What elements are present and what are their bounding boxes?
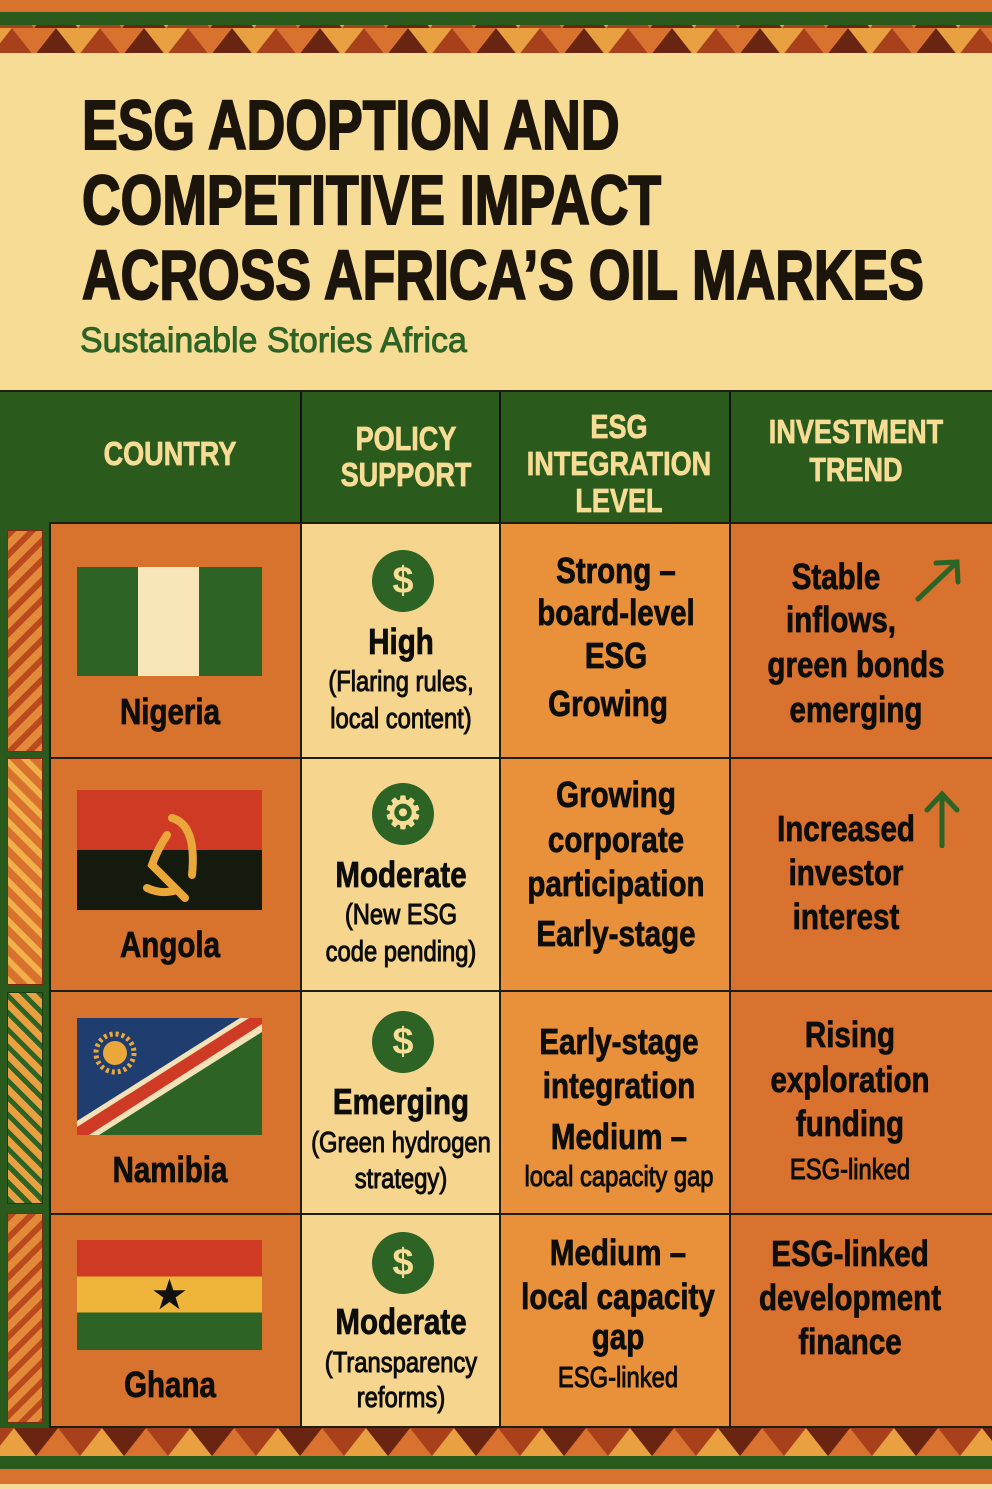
- investment texts: Stable: [792, 556, 880, 597]
- title: ESG ADOPTION AND: [82, 86, 620, 164]
- flag: Nigeria: [77, 567, 262, 676]
- arrow: diagonal up: [916, 559, 960, 602]
- top border: [0, 0, 992, 53]
- policy 2: Moderate: [335, 854, 467, 895]
- policy 3: strategy): [355, 1163, 447, 1195]
- investment texts: green bonds: [767, 644, 945, 685]
- icons: $: [392, 560, 414, 602]
- investment 2: Increased: [777, 808, 915, 849]
- esg 3: local capacity gap: [524, 1161, 714, 1193]
- header row: [0, 390, 992, 522]
- esg 2: corporate: [548, 819, 684, 860]
- esg 3: [524, 1021, 714, 1193]
- investment 2: [777, 808, 915, 937]
- title: ACROSS AFRICA’S OIL MARKES: [82, 236, 924, 314]
- policy 4: (Transparency: [325, 1347, 477, 1379]
- row cells: [49, 522, 992, 1428]
- investment 3: ESG-linked: [790, 1154, 910, 1186]
- investment 3: exploration: [770, 1059, 930, 1100]
- country: Nigeria: Nigeria: [120, 691, 220, 732]
- arrow: up: [924, 790, 960, 848]
- policy 2: (New ESG: [345, 899, 457, 931]
- investment 4: [759, 1233, 942, 1362]
- policy 3: (Green hydrogen: [311, 1127, 491, 1159]
- table: [0, 390, 992, 1428]
- esg 2: [527, 774, 705, 954]
- investment texts: emerging: [790, 689, 922, 730]
- esg 3: Medium –: [551, 1116, 687, 1157]
- icon: dollar 4: $: [392, 1242, 414, 1284]
- esg texts: Strong –: [556, 550, 676, 591]
- header: investment: TREND: [809, 451, 903, 488]
- subtitle: Sustainable Stories Africa: [80, 321, 467, 360]
- country: Ghana: Ghana: [124, 1364, 216, 1405]
- icon: dollar 4: [372, 1232, 434, 1294]
- header: policy: [341, 420, 472, 493]
- investment 3: Rising: [805, 1014, 895, 1055]
- title: COMPETITIVE IMPACT: [82, 161, 661, 239]
- esg 4: gap: [592, 1316, 644, 1357]
- esg 4: Medium –: [550, 1232, 686, 1273]
- policy texts: (Flaring rules,: [328, 666, 474, 698]
- investment 4: development: [759, 1277, 941, 1318]
- investment 2: investor: [789, 852, 903, 893]
- policy texts: [328, 621, 474, 735]
- flag: Ghana: ★: [151, 1271, 188, 1318]
- investment 4: ESG-linked: [771, 1233, 929, 1274]
- policy texts: High: [368, 621, 434, 662]
- policy 4: reforms): [357, 1382, 445, 1414]
- policy 2: [326, 854, 476, 968]
- title: [82, 86, 924, 314]
- left pattern strips: [7, 530, 43, 1423]
- policy texts: local content): [330, 703, 472, 735]
- flag: Angola: [77, 790, 262, 910]
- esg texts: Growing: [548, 683, 668, 724]
- header: esg: ESG: [590, 408, 648, 445]
- policy 2: code pending): [326, 936, 476, 968]
- icon: dollar 3: [372, 1011, 434, 1073]
- header: investment: INVESTMENT: [769, 413, 943, 450]
- investment texts: inflows,: [786, 599, 896, 640]
- investment 3: [770, 1014, 930, 1186]
- esg 3: integration: [543, 1065, 695, 1106]
- icon: dollar 3: $: [392, 1021, 414, 1063]
- esg 4: [521, 1232, 716, 1394]
- esg 2: Growing: [556, 774, 676, 815]
- esg 3: Early-stage: [539, 1021, 699, 1062]
- esg 2: participation: [527, 863, 705, 904]
- esg texts: ESG: [585, 635, 647, 676]
- esg 4: local capacity: [521, 1276, 715, 1317]
- header: policy: SUPPORT: [341, 456, 471, 493]
- investment 2: interest: [793, 896, 899, 937]
- icon: gear: ⚙: [383, 789, 423, 838]
- header: esg: [527, 408, 711, 519]
- flag: Ghana: [77, 1240, 262, 1350]
- icon: gear: [372, 783, 434, 845]
- icons: [372, 550, 434, 612]
- investment 4: finance: [798, 1321, 902, 1362]
- header: esg: INTEGRATION: [527, 445, 711, 482]
- bottom border: [0, 1428, 992, 1484]
- esg 4: ESG-linked: [558, 1362, 678, 1394]
- header: esg: LEVEL: [575, 482, 663, 519]
- country: Angola: Angola: [120, 924, 220, 965]
- policy 3: [311, 1081, 491, 1195]
- esg texts: [537, 550, 695, 724]
- investment texts: [767, 556, 945, 730]
- flag: Namibia: [77, 1018, 262, 1135]
- country: Namibia: Namibia: [113, 1149, 227, 1190]
- esg texts: board-level: [537, 592, 695, 633]
- policy 4: [325, 1301, 478, 1414]
- policy 3: Emerging: [333, 1081, 469, 1122]
- header: investment: [769, 413, 944, 488]
- header: policy: POLICY: [356, 420, 456, 457]
- esg 2: Early-stage: [536, 913, 696, 954]
- header: country: COUNTRY: [104, 435, 236, 472]
- policy 4: Moderate: [335, 1301, 467, 1342]
- investment 3: funding: [796, 1103, 904, 1144]
